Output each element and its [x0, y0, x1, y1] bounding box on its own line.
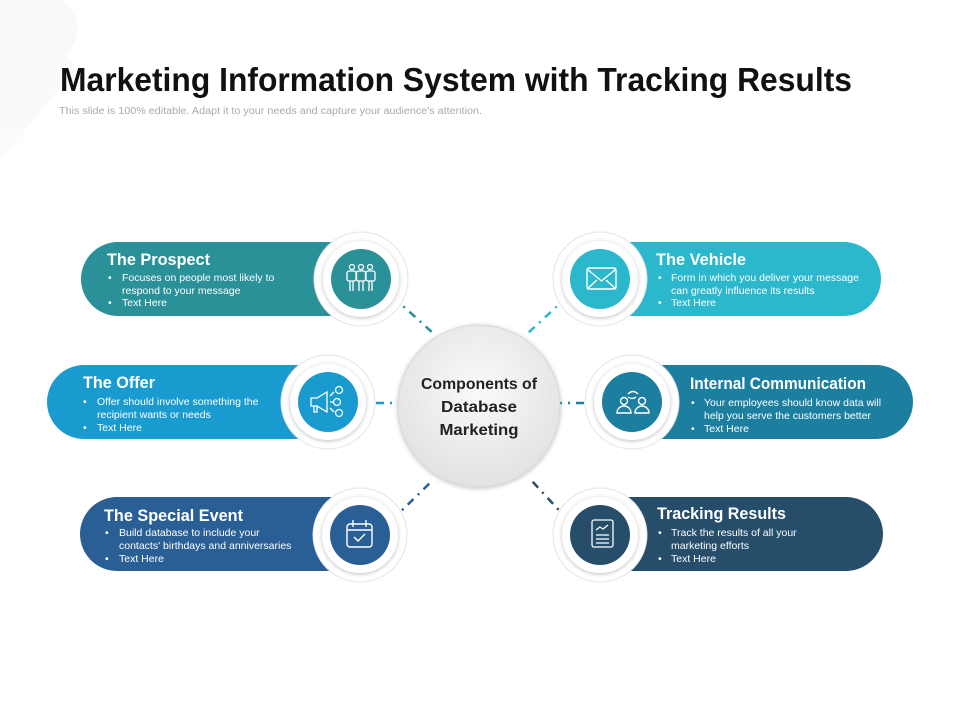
panel: The Special Event: [80, 488, 407, 582]
panel: The Vehicle: Text Here: [671, 297, 716, 309]
panel: The Offer: Text Here: [97, 422, 142, 434]
panel: The Special Event: Build database to include your: [119, 527, 260, 539]
panel: The Offer: •: [83, 396, 87, 408]
panel: The Special Event: •: [105, 553, 109, 565]
icon: envelope: [587, 268, 616, 289]
panel: Tracking Results: Text Here: [671, 553, 716, 565]
decorative background shapes: [0, 0, 78, 160]
panel: Internal Communication: •: [691, 397, 695, 409]
connectors: [376, 297, 584, 520]
panel: Internal Communication: help you serve the customers better: [704, 410, 871, 422]
panel: Internal Communication: Text Here: [704, 423, 749, 435]
panel: Tracking Results: •: [658, 527, 662, 539]
center circle: Database: [441, 399, 517, 416]
subtitle: This slide is 100% editable. Adapt it to your needs and capture your audience's attention.: [59, 106, 482, 117]
panel: Tracking Results: •: [658, 553, 662, 565]
panel: The Vehicle: Form in which you deliver your message: [671, 272, 859, 284]
panel: The Vehicle: [553, 232, 881, 326]
panel: The Prospect: •: [108, 297, 112, 309]
panel: Internal Communication: [585, 355, 913, 449]
panel: The Offer: recipient wants or needs: [97, 409, 211, 421]
icon: calendar: [347, 520, 372, 547]
panel: The Prospect: respond to your message: [122, 285, 241, 297]
panel: Tracking Results: Tracking Results: [657, 504, 786, 523]
center circle: Components of: [421, 376, 538, 393]
title: Marketing Information System with Tracking Results: [60, 61, 852, 98]
panel: The Vehicle: •: [658, 272, 662, 284]
panel: The Offer: •: [83, 422, 87, 434]
panel: The Offer: Offer should involve something the: [97, 396, 259, 408]
panel: The Special Event: •: [105, 527, 109, 539]
panel: The Vehicle: •: [658, 297, 662, 309]
icon: people: [347, 264, 375, 291]
panel: The Vehicle: can greatly influence its results: [671, 285, 815, 297]
panel: The Prospect: The Prospect: [107, 250, 210, 269]
panel: Tracking Results: marketing efforts: [671, 540, 749, 552]
panel: The Special Event: Text Here: [119, 553, 164, 565]
center circle: [398, 325, 560, 487]
panel: Tracking Results: [553, 488, 883, 582]
icon: two people exchanging: [617, 392, 649, 413]
panel: The Special Event: The Special Event: [104, 506, 243, 525]
panel: The Prospect: Text Here: [122, 297, 167, 309]
panel: The Prospect: •: [108, 272, 112, 284]
panel: The Special Event: contacts' birthdays and anniversaries: [119, 540, 291, 552]
icon: megaphone: [311, 386, 342, 416]
panel: Internal Communication: Your employees should know data will: [704, 397, 881, 409]
panel: Internal Communication: •: [691, 423, 695, 435]
center circle: Marketing: [440, 422, 518, 439]
icon: report: [592, 520, 613, 547]
panel: The Offer: [47, 355, 375, 449]
panel: The Offer: The Offer: [83, 373, 155, 392]
panel: The Vehicle: The Vehicle: [656, 250, 746, 269]
panel: Internal Communication: Internal Communication: [690, 374, 866, 393]
panel: The Prospect: Focuses on people most likely to: [122, 272, 274, 284]
panel: The Prospect: [81, 232, 408, 326]
panel: Tracking Results: Track the results of all your: [671, 527, 797, 539]
